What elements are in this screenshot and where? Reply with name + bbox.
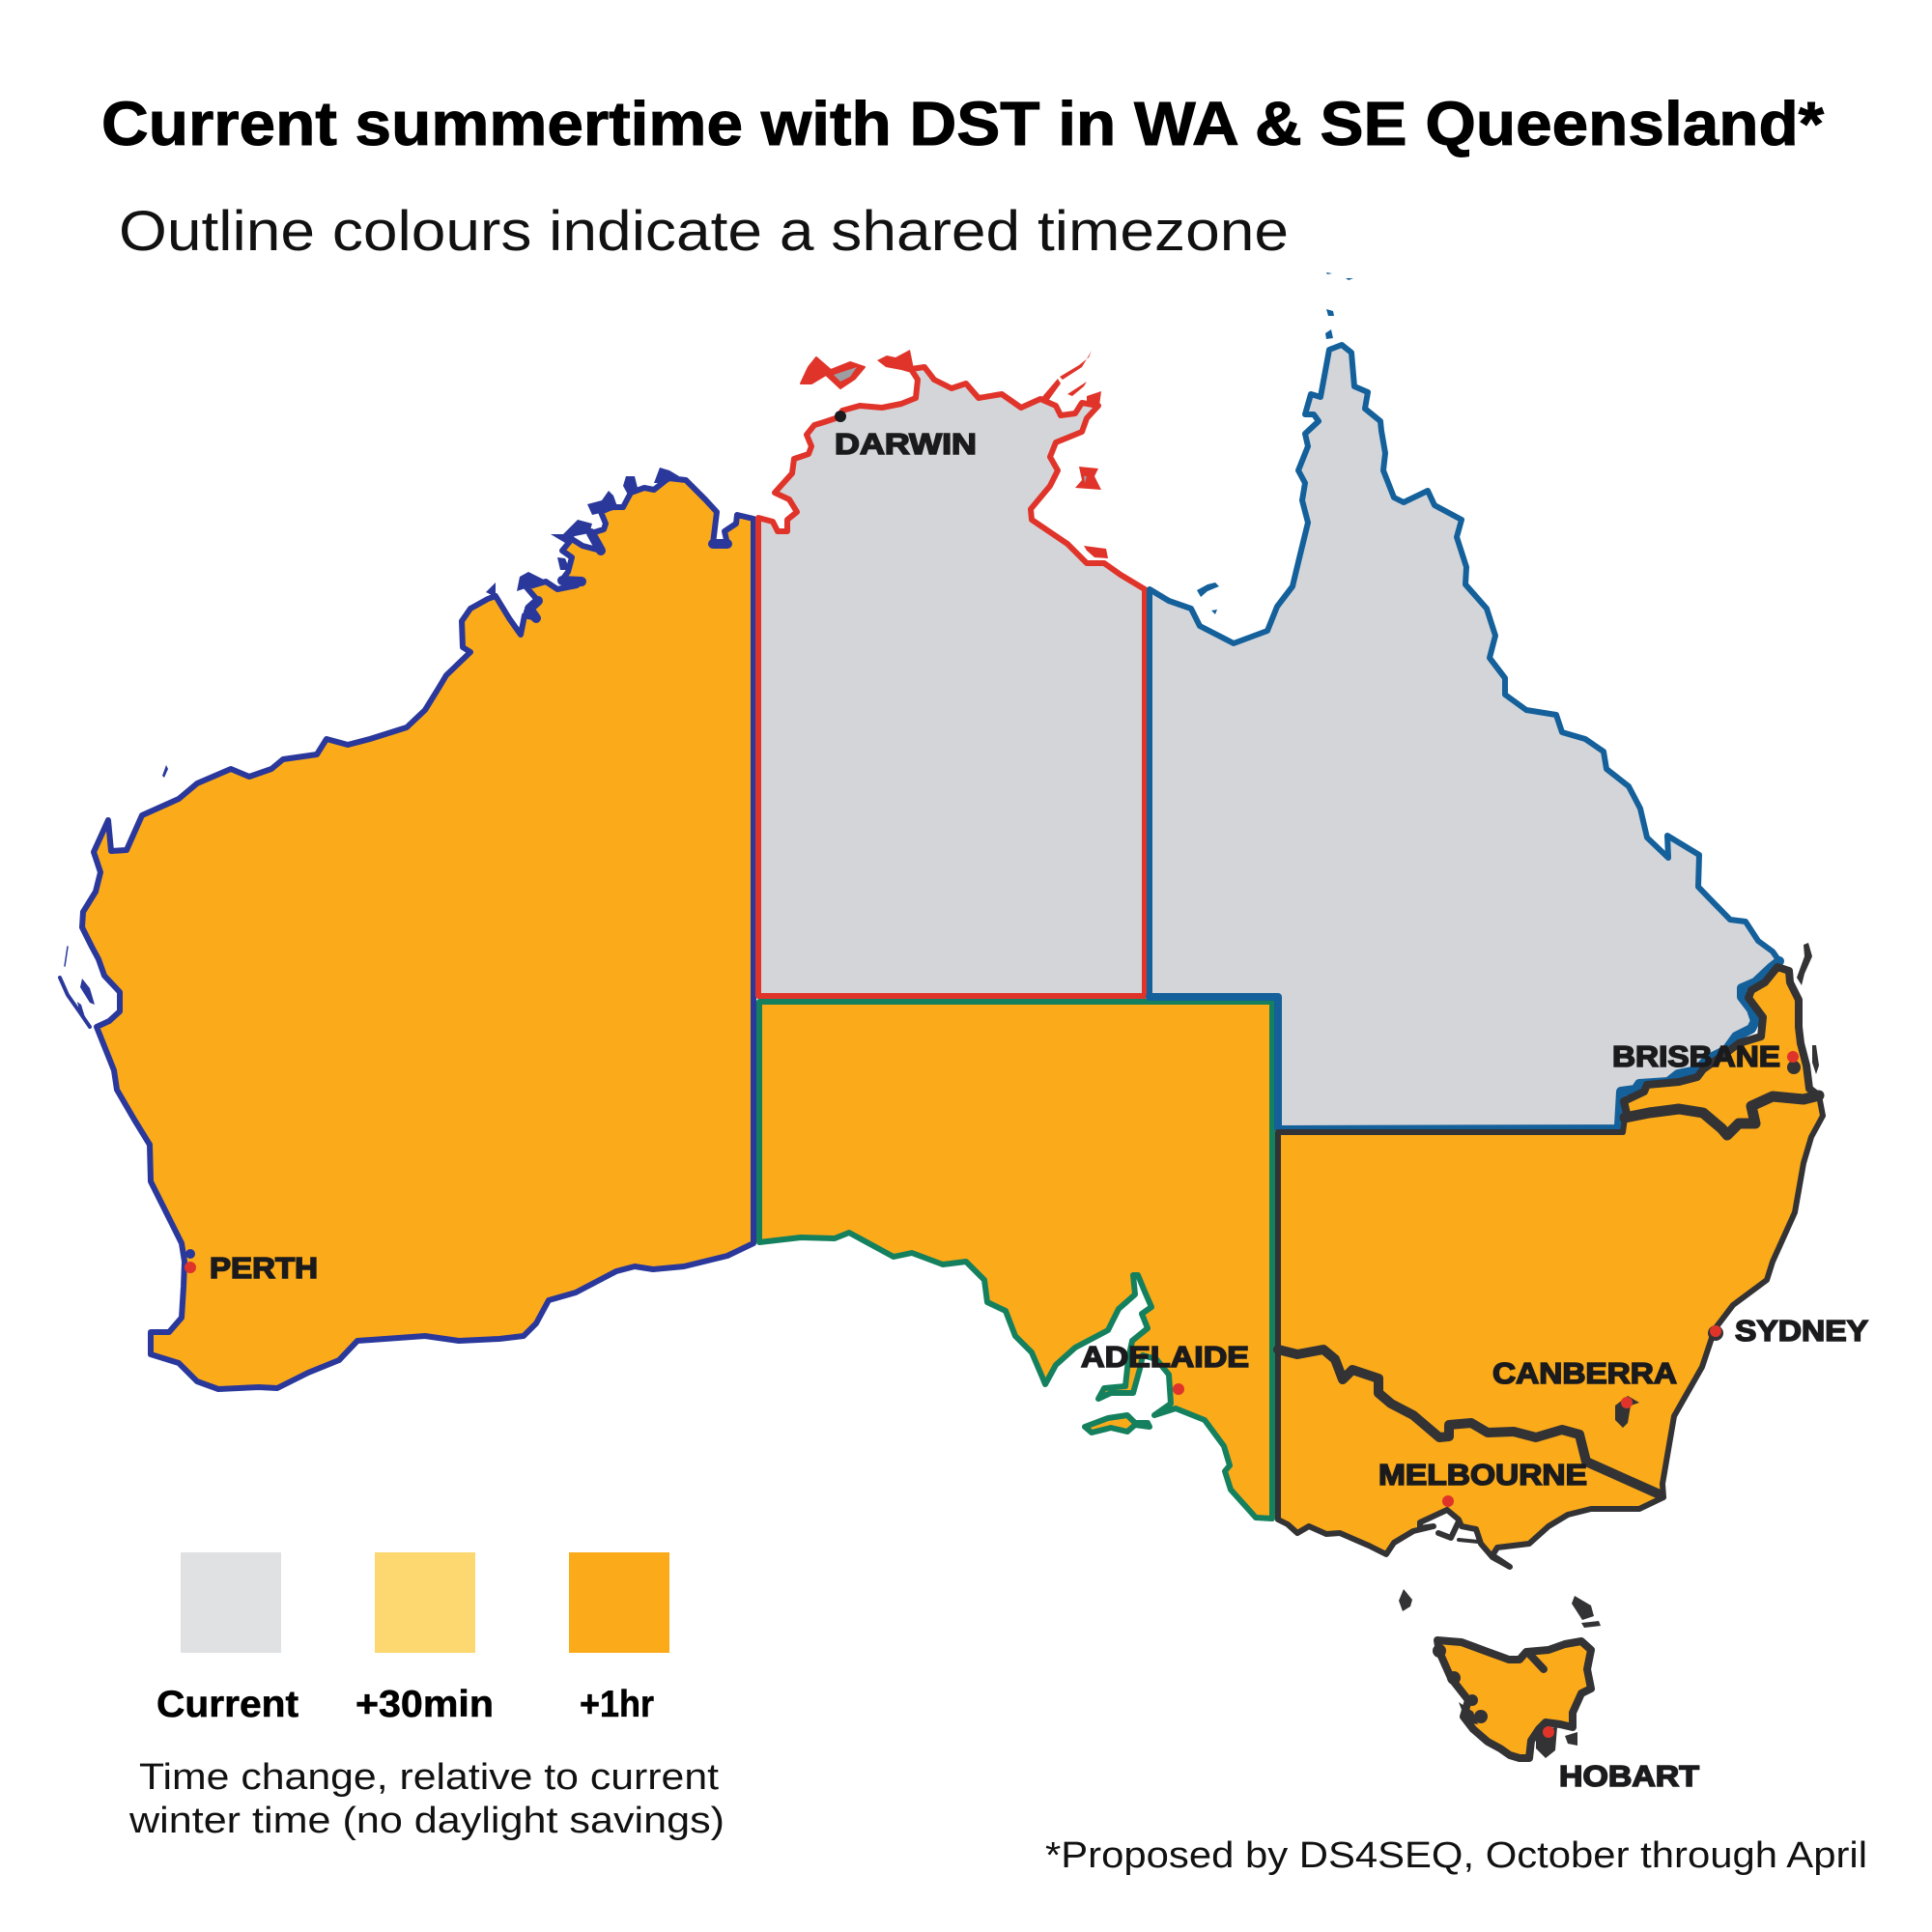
city: Canberra: CANBERRA <box>1492 1356 1677 1390</box>
region: South East Queensland <box>1624 943 1819 1135</box>
island: Barrow <box>162 765 168 778</box>
island: Groote Eylandt <box>1075 467 1101 490</box>
island: Kangaroo Island <box>1085 1415 1150 1433</box>
legend description <box>128 1757 724 1841</box>
Arnhem jagged coast <box>1040 351 1101 406</box>
island: Cobourg coast <box>877 350 915 374</box>
legend <box>128 1552 724 1841</box>
city: Darwin <box>835 411 977 461</box>
region: Northern Territory <box>758 350 1145 996</box>
city: Melbourne: MELBOURNE <box>1378 1458 1587 1492</box>
island: Pellew group <box>1084 546 1108 558</box>
city: Hobart <box>1543 1726 1699 1793</box>
island: King Island <box>1399 1589 1412 1611</box>
region: New South Wales and Victoria <box>1278 1095 1823 1567</box>
legend swatch: plus 30 minutes <box>375 1552 475 1653</box>
island: Moreton Bay islands <box>1812 1045 1819 1074</box>
city: Perth: PERTH <box>210 1251 318 1285</box>
subtitle: Outline colours indicate a shared timezone <box>119 200 1289 263</box>
city: Sydney: SYDNEY <box>1735 1314 1868 1348</box>
city: Adelaide <box>1081 1340 1249 1395</box>
region: South Australia <box>759 1002 1272 1519</box>
legend label: current: Current <box>156 1684 298 1725</box>
region: Queensland <box>1150 272 1779 1128</box>
border: New South Wales and Victoria <box>1278 1350 1660 1494</box>
footnote: *Proposed by DS4SEQ, October through April <box>1045 1835 1867 1876</box>
island: Flinders Island <box>1572 1596 1594 1620</box>
Brisbane bay detail <box>1787 1061 1801 1074</box>
region: Australian Capital Territory <box>1615 1396 1639 1428</box>
city: Adelaide: ADELAIDE <box>1081 1340 1249 1374</box>
legend description: winter time (no daylight savings) <box>128 1801 724 1841</box>
Kimberley inlets <box>529 533 727 618</box>
legend label: plus 30 minutes: +30min <box>355 1684 494 1725</box>
city: Brisbane: BRISBANE <box>1612 1039 1780 1073</box>
city: Hobart: HOBART <box>1559 1759 1699 1793</box>
legend description: Time change, relative to current <box>139 1757 719 1798</box>
title: Current summertime with DST in WA & SE Queensland* <box>101 89 1824 158</box>
island: Fraser Island <box>1797 943 1812 985</box>
legend swatch: current <box>181 1552 281 1653</box>
island: Bruny Island <box>1565 1732 1577 1746</box>
region: Western Australia <box>60 468 753 1389</box>
city: Canberra <box>1492 1356 1677 1408</box>
legend swatch: plus 1 hour <box>569 1552 669 1653</box>
Sydney harbour <box>1708 1325 1723 1341</box>
city: Darwin: DARWIN <box>835 427 977 461</box>
Port Phillip peninsula <box>1438 1521 1459 1538</box>
Phillip Island <box>1459 1540 1478 1542</box>
border: Queensland and New South Wales <box>1625 1095 1819 1135</box>
island: Cape Barren Island <box>1581 1621 1601 1628</box>
Hobart harbour <box>1536 1727 1557 1758</box>
city: Melbourne <box>1378 1458 1587 1507</box>
island: Tiwi <box>801 357 865 388</box>
region: Tasmania <box>1399 1589 1601 1758</box>
legend label: plus 1 hour: +1hr <box>580 1684 654 1725</box>
Shark Bay islands <box>60 947 95 1027</box>
Kimberley jagged coast <box>486 468 679 597</box>
